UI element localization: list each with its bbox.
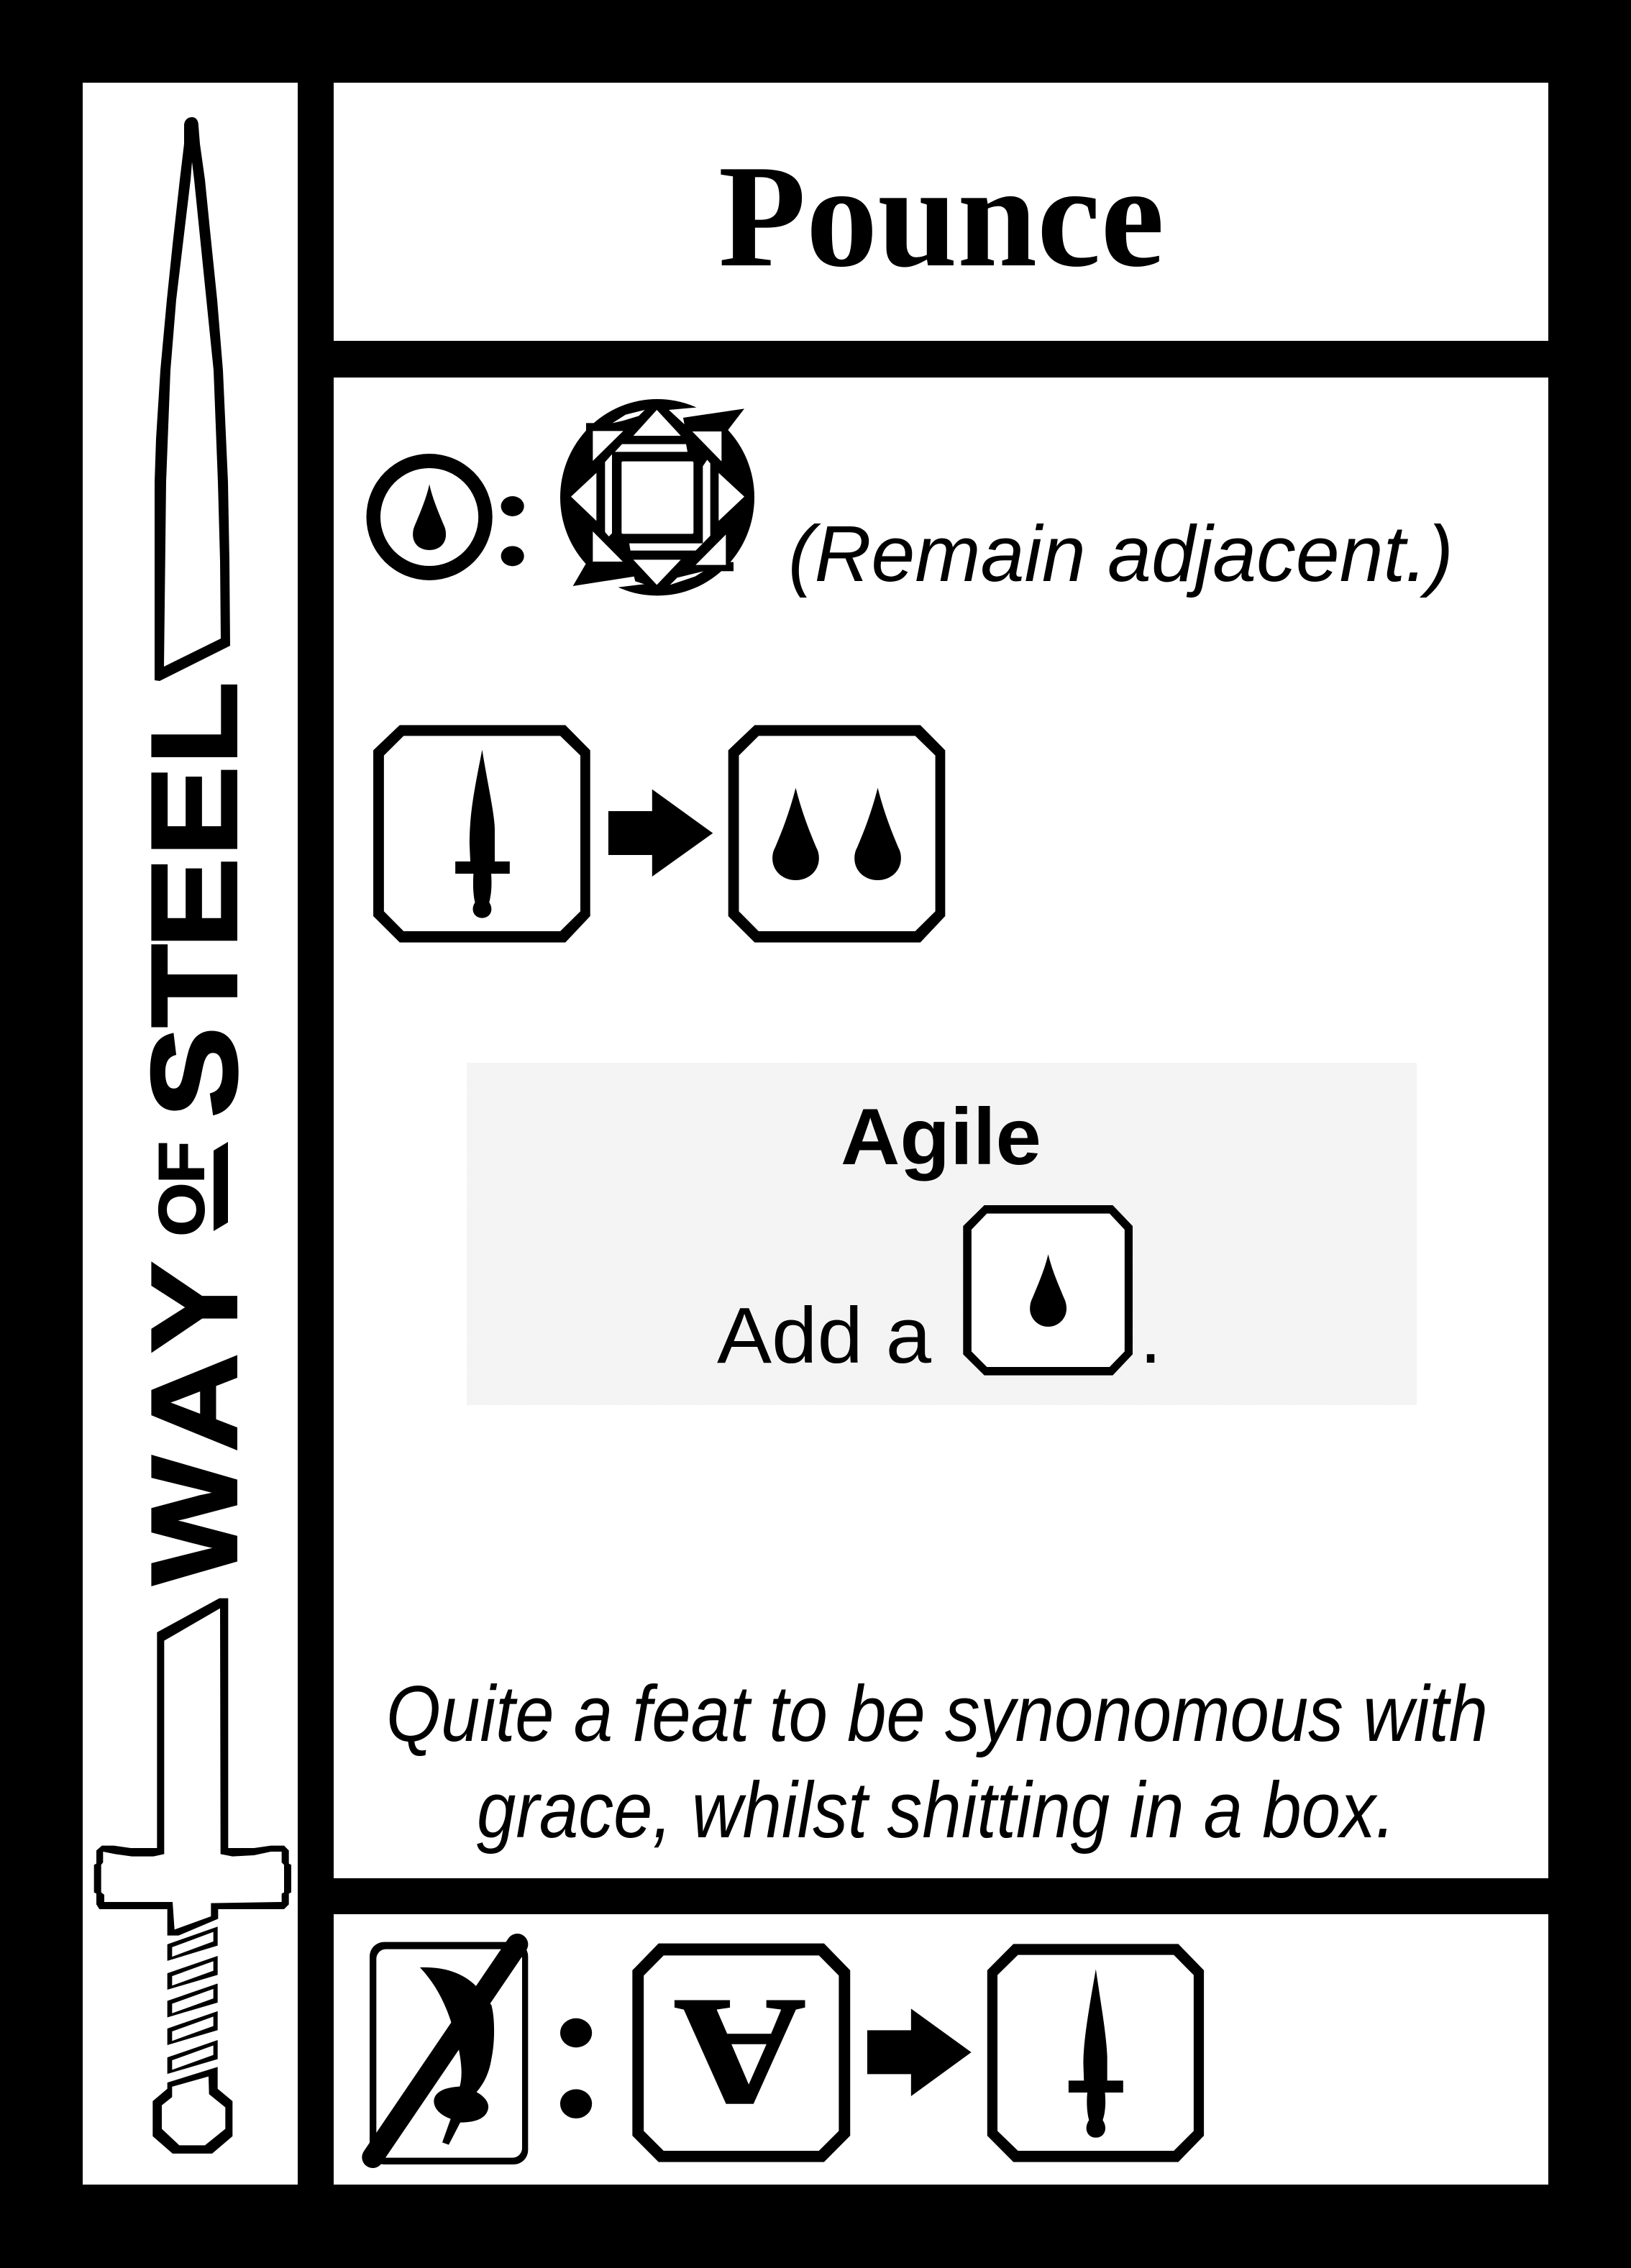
tile: dagger (373, 725, 590, 943)
icon: sword hilt guard (94, 1599, 291, 1936)
icon: sword blade tip (155, 117, 230, 681)
text: period: . (1140, 1291, 1161, 1380)
inverted letter A: A (675, 1967, 805, 2139)
tile: single blood drop (963, 1205, 1133, 1376)
text: add a: Add a (717, 1291, 932, 1380)
wordmark: Way of Steel (127, 682, 262, 1584)
tile: inverted A (632, 1944, 850, 2162)
icon: sword grip and pommel (152, 1926, 232, 2154)
tile: two blood drops (728, 725, 945, 943)
title: Pounce (718, 135, 1164, 298)
icon: crossed out scimitar card (370, 1942, 528, 2164)
callout: agile (467, 1063, 1417, 1405)
colon (501, 496, 524, 566)
flavor text (386, 1670, 1488, 1855)
tile: dagger (987, 1944, 1204, 2162)
effect row: dagger to two blood (373, 725, 945, 943)
wordmark: Way of Steel: STEEL (127, 682, 262, 1117)
wordmark: Way of Steel: WAY (127, 1262, 262, 1584)
heading: agile: Agile (841, 1092, 1041, 1181)
wordmark: Way of Steel: OF (145, 1141, 217, 1236)
panel: title (334, 83, 1548, 341)
flavor text: Quite a feat to be synonomous with (386, 1670, 1488, 1758)
icon: blood cost circle with drop (366, 454, 524, 580)
arrow (867, 2008, 972, 2096)
colon (560, 2018, 592, 2118)
flavor text: grace, whilst shitting in a box. (477, 1766, 1395, 1855)
icon: stance emblem (554, 392, 769, 605)
panel: bottom reaction (334, 1914, 1548, 2185)
arrow (608, 790, 713, 877)
panel: sidebar (83, 83, 298, 2185)
panel: ability body (334, 378, 1548, 1878)
text: remain adjacent: (Remain adjacent.) (788, 510, 1453, 598)
